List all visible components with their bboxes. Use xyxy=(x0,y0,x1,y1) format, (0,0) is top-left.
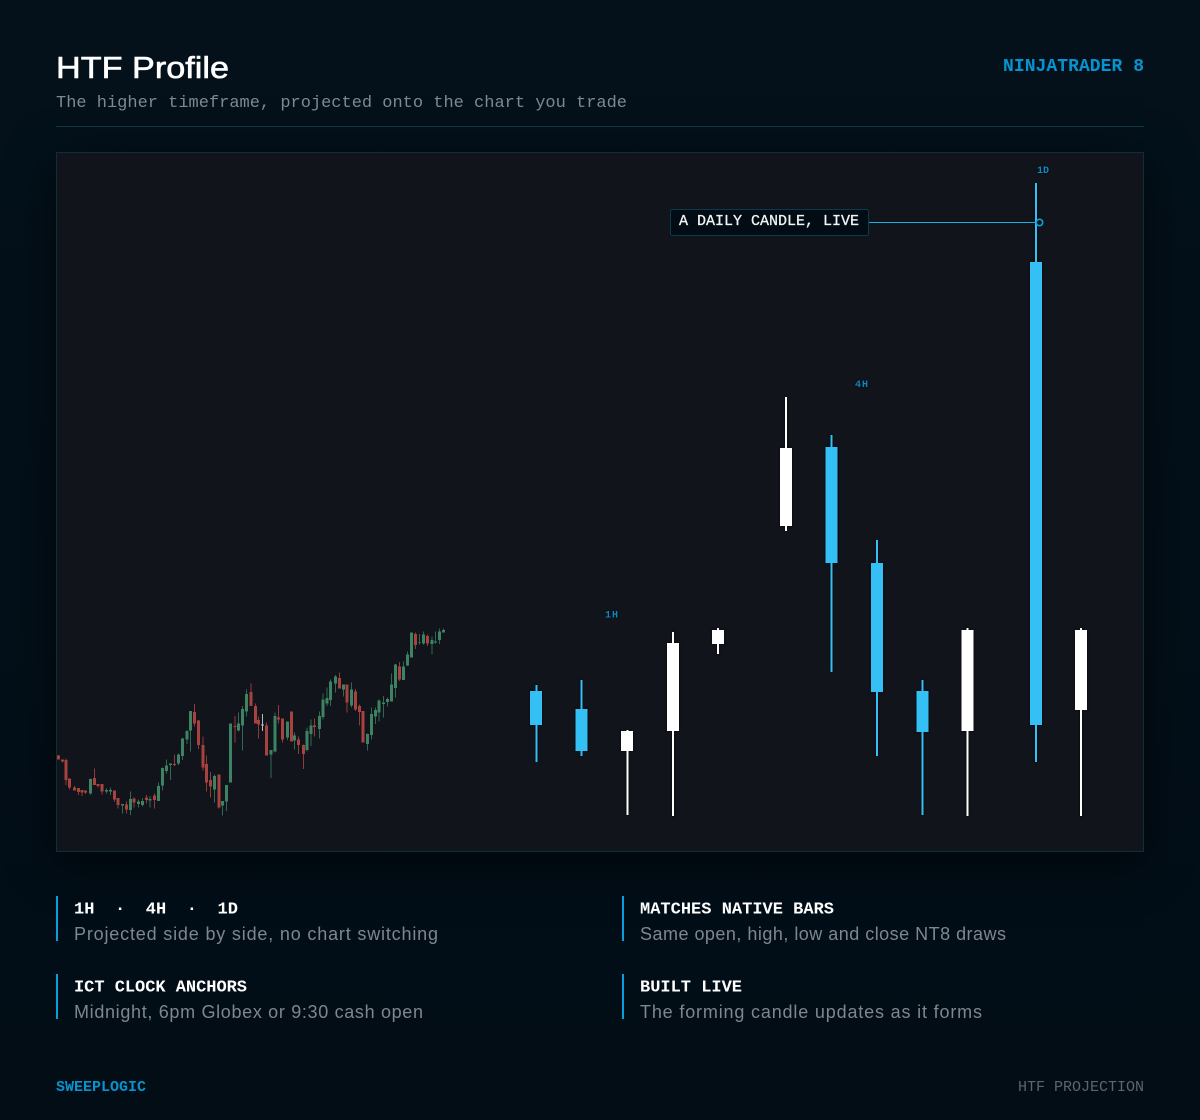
footer brand: SWEEPLOGIC xyxy=(56,1079,146,1096)
small candles: right half xyxy=(251,628,443,778)
feature: ICT clock anchors: ICT CLOCK ANCHORS xyxy=(74,978,247,998)
chart panel background xyxy=(56,152,1144,852)
feature: timeframes xyxy=(56,896,438,944)
callout: a daily candle, live xyxy=(670,210,1043,236)
1D projected candles xyxy=(1030,166,1087,816)
label: 4H: 4H xyxy=(855,380,868,391)
footer tag: HTF PROJECTION xyxy=(1018,1079,1144,1096)
feature: matches native bars xyxy=(622,896,1006,944)
1H projected candles xyxy=(530,610,724,816)
subtitle: The higher timeframe, projected onto the chart you trade xyxy=(56,94,627,113)
feature: built live: BUILT LIVE xyxy=(640,978,742,998)
feature: matches native bars: Same open, high, low and close NT8 draws xyxy=(640,924,1006,944)
callout: a daily candle, live: A DAILY CANDLE, LIVE xyxy=(679,213,859,230)
4H projected candles xyxy=(780,380,974,816)
feature: matches native bars: MATCHES NATIVE BARS xyxy=(640,900,834,920)
label: 1D: 1D xyxy=(1037,166,1049,177)
label: 1H: 1H xyxy=(605,610,618,622)
feature: ICT clock anchors: Midnight, 6pm Globex or 9:30 cash open xyxy=(74,1002,423,1022)
feature: built live xyxy=(622,974,982,1022)
small candles: left half xyxy=(58,689,246,816)
platform label: NINJATRADER 8 xyxy=(1003,57,1144,77)
feature: timeframes: Projected side by side, no chart switching xyxy=(74,924,438,944)
feature: built live: The forming candle updates as it forms xyxy=(640,1002,982,1022)
feature: ICT clock anchors xyxy=(56,974,423,1022)
feature: timeframes: 1H · 4H · 1D xyxy=(74,900,238,920)
title: HTF Profile xyxy=(56,50,229,85)
lower timeframe candlestick chart xyxy=(58,628,443,816)
